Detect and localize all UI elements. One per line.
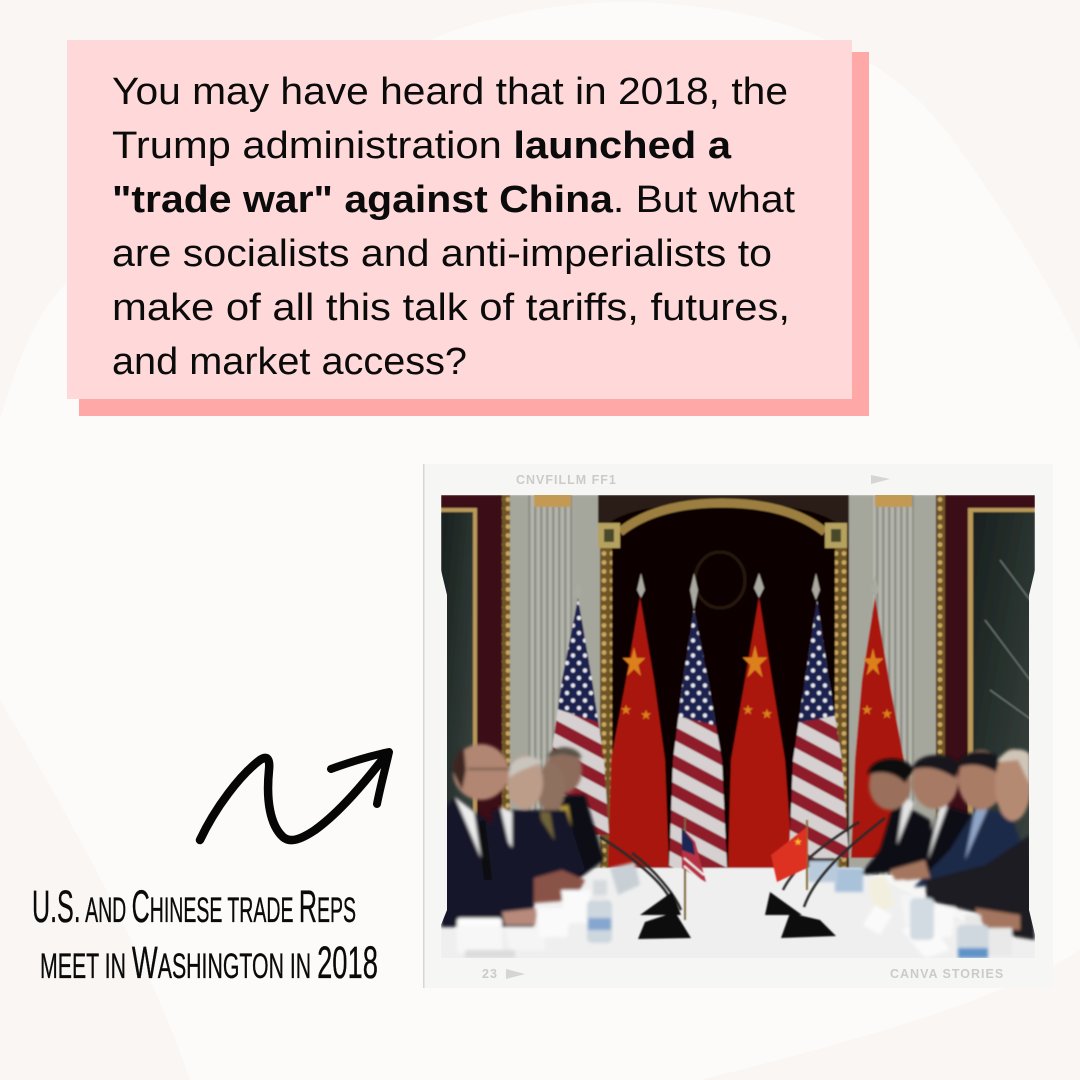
- China flag 3: [851, 597, 906, 858]
- intro paragraph: [112, 71, 795, 383]
- head 2: [912, 755, 958, 809]
- film arrow bottom: [506, 969, 525, 979]
- US flag 2: [668, 610, 728, 869]
- panel: intro text: [67, 40, 869, 416]
- flagpole finials: [636, 572, 878, 610]
- China delegation: [860, 749, 1035, 940]
- intro paragraph: make of all this talk of tariffs, futures,: [112, 287, 790, 329]
- China flag 2: [728, 597, 793, 868]
- caption: MEET IN WASHINGTON IN 2018: [40, 937, 378, 988]
- US flag 3: [788, 600, 850, 860]
- US delegation: [441, 744, 604, 927]
- head 3: [958, 750, 1004, 810]
- intro paragraph: You may have heard that in 2018, the: [112, 71, 788, 113]
- room wall: [441, 495, 1035, 875]
- photo: trade delegations: [440, 494, 1040, 960]
- columns: [510, 495, 600, 875]
- film label bottom: CANVA STORIES: [890, 967, 1004, 981]
- panel shadow: [79, 52, 869, 416]
- table: [582, 866, 874, 876]
- back delegate: [546, 747, 582, 793]
- China flag 1: [608, 597, 669, 868]
- panel face: [67, 40, 852, 399]
- photo frame: [423, 464, 1053, 988]
- intro paragraph: and market access?: [112, 341, 467, 383]
- head 4: [995, 749, 1031, 821]
- suit 4: [926, 835, 1035, 940]
- film label top: CNVFILLM FF1: [516, 473, 617, 487]
- flags: [545, 590, 906, 875]
- desk flag: China: [771, 820, 808, 890]
- suit 1: [860, 800, 935, 875]
- suit 3: [914, 810, 1024, 887]
- hands: [890, 860, 1020, 930]
- arrow: [200, 752, 389, 840]
- caption: [32, 881, 378, 988]
- caption: U.S. AND CHINESE TRADE REPS: [32, 881, 356, 932]
- table items: cups and bottles: [457, 860, 1012, 959]
- film number: 23: [482, 967, 498, 981]
- microphones: [600, 818, 885, 939]
- intro paragraph: "trade war" against China . But what: [112, 179, 795, 221]
- film border: [423, 464, 1053, 988]
- gold strips: [502, 495, 510, 875]
- arch: [600, 495, 848, 875]
- delegate 2: [507, 755, 543, 809]
- head 1: [869, 760, 911, 810]
- marble panels: [441, 512, 473, 811]
- lead delegate: [453, 744, 509, 800]
- desk flag: USA: [682, 818, 706, 920]
- US flag 1: [552, 598, 610, 836]
- film arrow top: [871, 475, 890, 484]
- hands: [534, 870, 585, 903]
- intro paragraph: Trump administration launched a: [112, 125, 732, 167]
- intro paragraph: are socialists and anti-imperialists to: [112, 233, 772, 275]
- delegate 3: [537, 763, 565, 813]
- suit 2: [905, 805, 975, 880]
